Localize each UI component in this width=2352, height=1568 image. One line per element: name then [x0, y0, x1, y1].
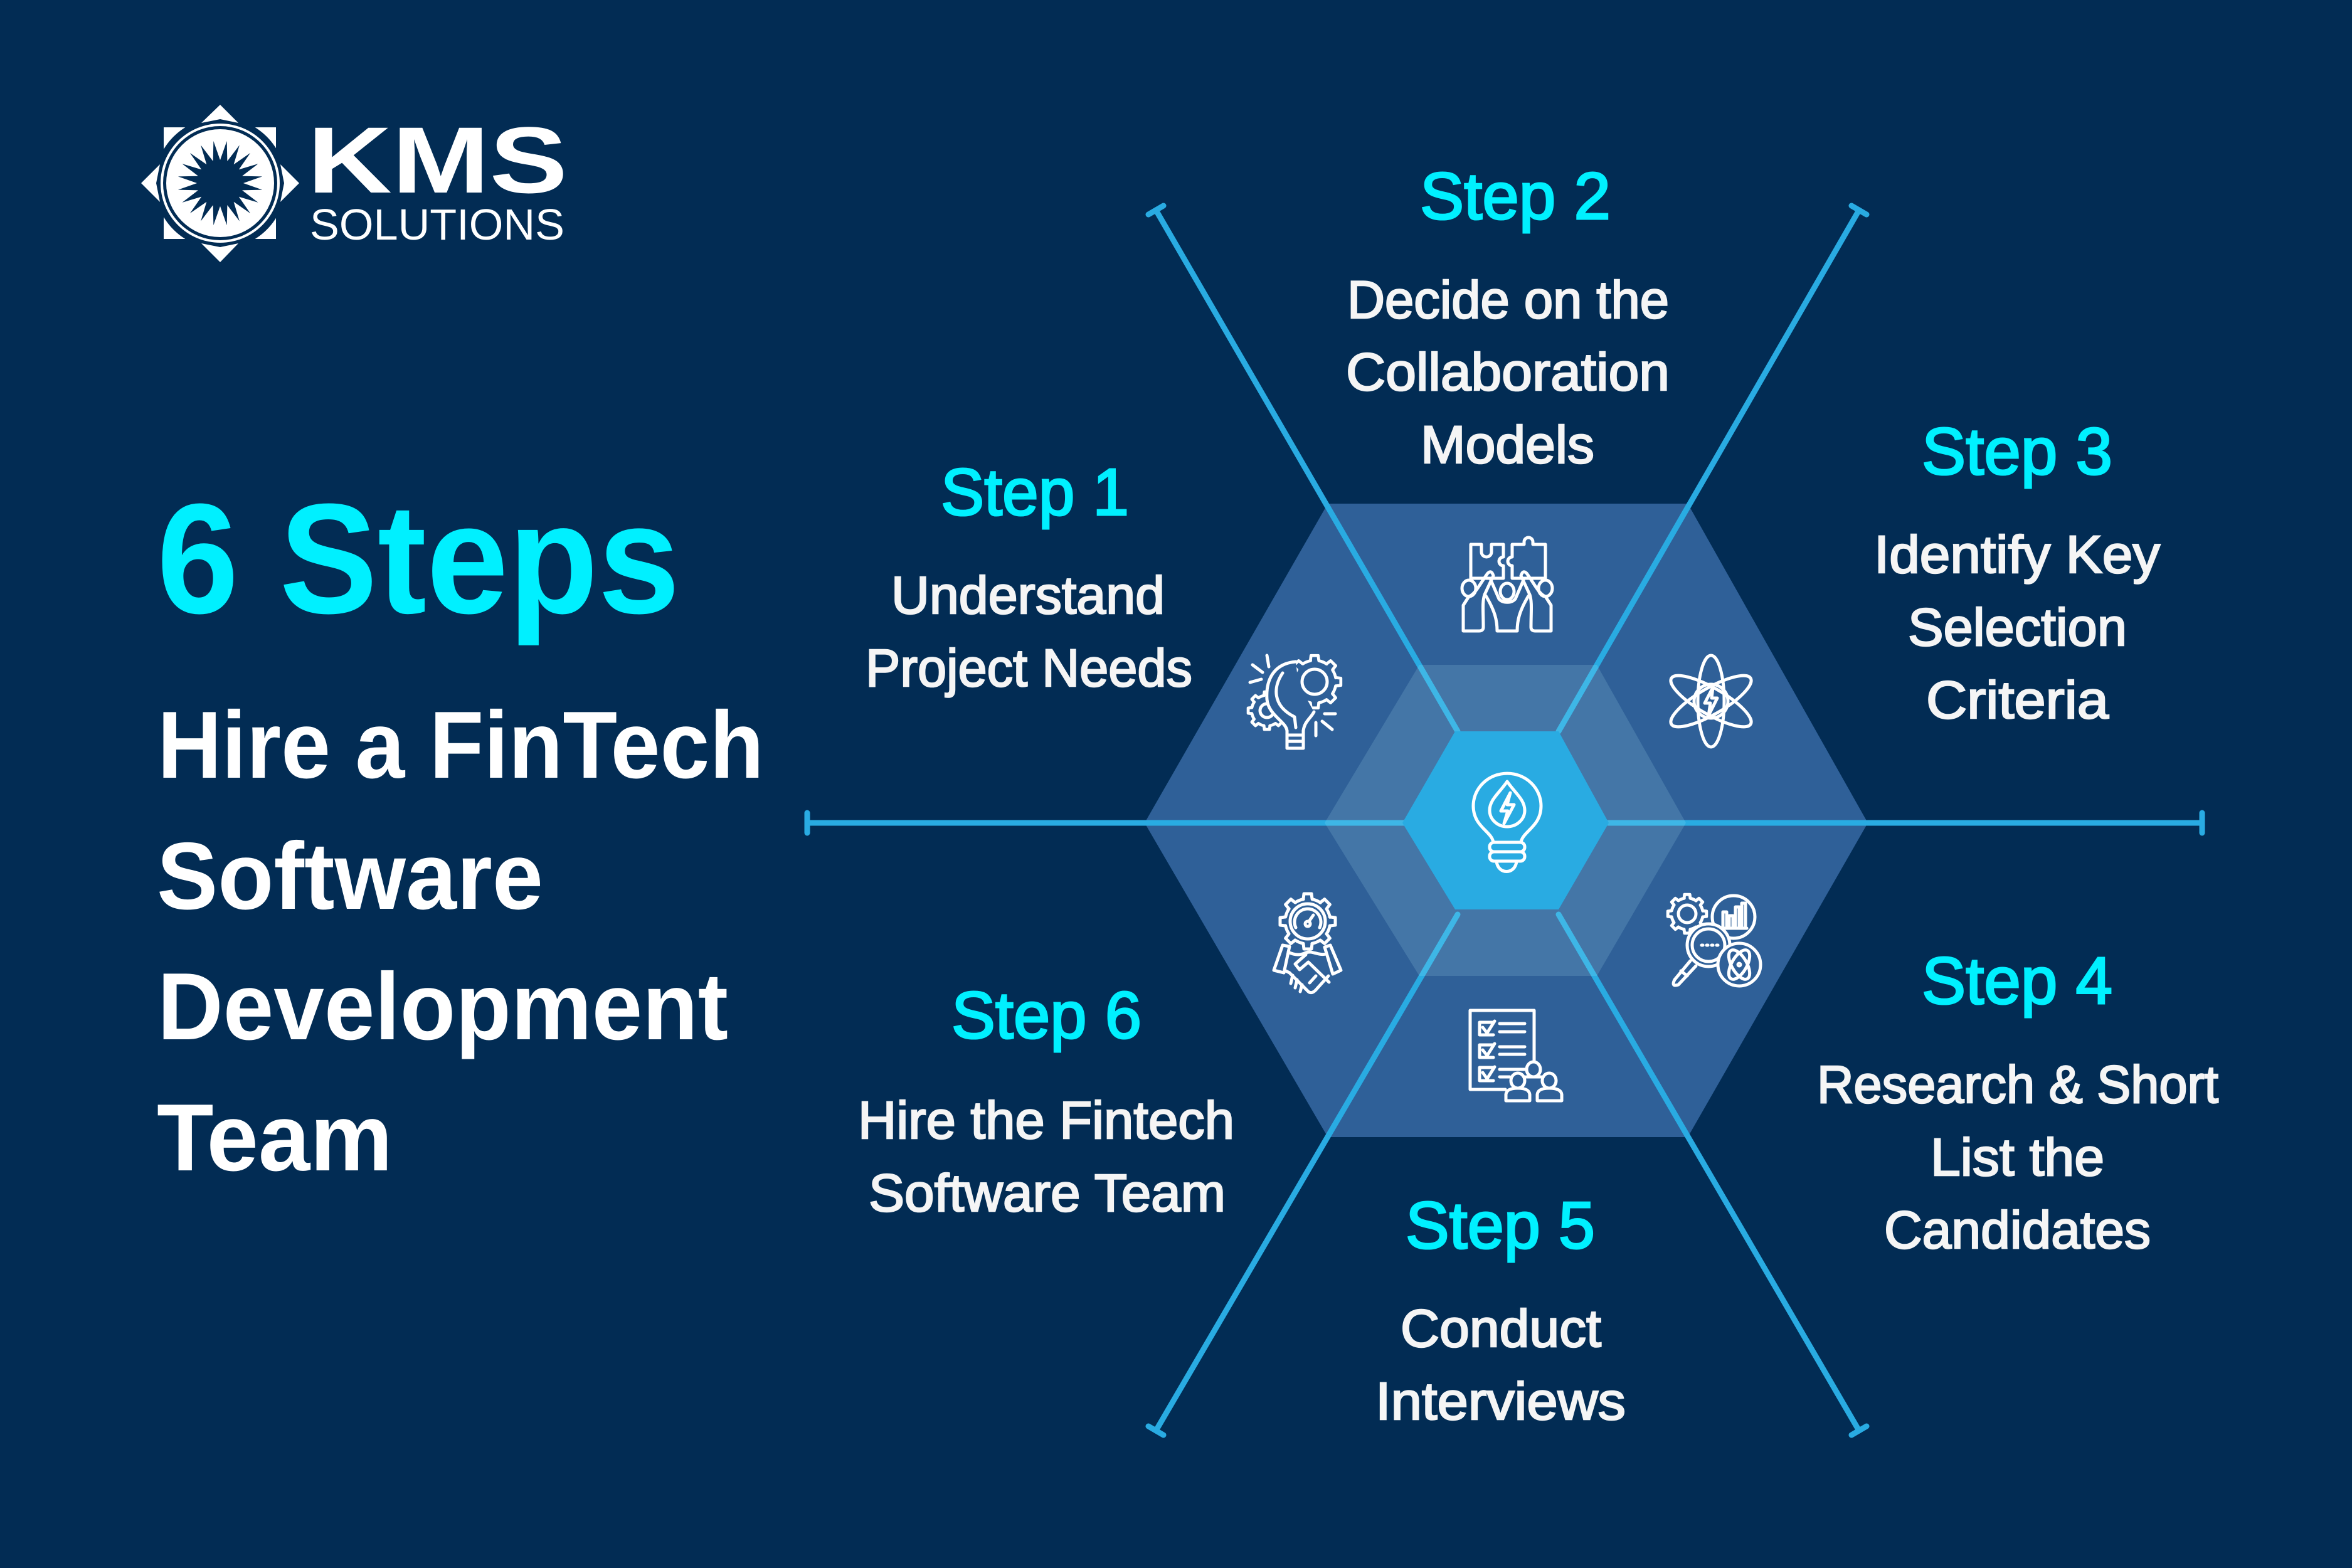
step 3 text: Criteria [1926, 670, 2109, 729]
step 6 text: Step 6 [951, 978, 1142, 1052]
inner hexagon [1402, 731, 1609, 909]
step 1 text: Understand [891, 566, 1165, 625]
step 5 text: Interviews [1375, 1372, 1626, 1431]
step 5 text: Conduct [1401, 1299, 1601, 1358]
step 6 text: Hire the Fintech [858, 1091, 1234, 1150]
icon: gears and bulb (step 1) [1248, 655, 1341, 748]
step 2 text: Collaboration [1346, 342, 1670, 401]
step 6 text [858, 978, 1234, 1222]
icon: gauge gear and handshake (step 6) [1274, 894, 1341, 993]
logo: KMS Solutions [141, 105, 568, 262]
step 5 text: Step 5 [1406, 1189, 1595, 1263]
step 2 text: Decide on the [1347, 270, 1669, 329]
step 4 text: Research & Short [1817, 1055, 2218, 1114]
heading: 6 Steps: 6 Steps [157, 471, 680, 646]
step 3 text [1874, 415, 2160, 729]
step 1 text [866, 455, 1192, 697]
step 4 text: Candidates [1884, 1200, 2151, 1259]
logo wordmark KMS: KMS [307, 107, 568, 213]
step 1 text: Step 1 [941, 455, 1129, 529]
title: Hire a FinTech Software Development Team [157, 692, 764, 1191]
step 4 text [1817, 944, 2218, 1259]
icon: research gears, chart, magnifier (step 4) [1668, 894, 1761, 986]
icon: light bulb with drop [1473, 773, 1541, 872]
step 2 text: Step 2 [1420, 159, 1611, 233]
logo emblem [141, 105, 299, 262]
step 3 text: Step 3 [1922, 415, 2112, 489]
step 2 text: Models [1421, 415, 1594, 474]
spoke lines with end caps [807, 206, 2202, 1435]
title: Hire a FinTech Software Development Team: Development [157, 953, 728, 1060]
icon: puzzle teamwork (step 2) [1462, 538, 1552, 631]
step 6 text: Software Team [869, 1163, 1226, 1222]
title: Hire a FinTech Software Development Team: Hire a FinTech [157, 692, 764, 798]
step 3 text: Identify Key [1874, 525, 2160, 584]
middle hexagon [1325, 665, 1686, 976]
title: Hire a FinTech Software Development Team: Software [157, 823, 543, 930]
logo wordmark SOLUTIONS: SOLUTIONS [310, 200, 564, 249]
step 4 text: List the [1931, 1128, 2104, 1187]
title: Hire a FinTech Software Development Team: Team [157, 1084, 393, 1191]
icon: checklist with people (step 5) [1470, 1010, 1562, 1101]
step 1 text: Project Needs [866, 638, 1192, 697]
step 3 text: Selection [1908, 598, 2127, 657]
step 2 text [1346, 159, 1670, 474]
icon: atom with bolt (step 3) [1665, 655, 1757, 747]
step 5 text [1375, 1189, 1626, 1431]
outer hexagon [1145, 504, 1868, 1137]
step 4 text: Step 4 [1922, 944, 2112, 1018]
hexagon diagram [807, 206, 2202, 1435]
